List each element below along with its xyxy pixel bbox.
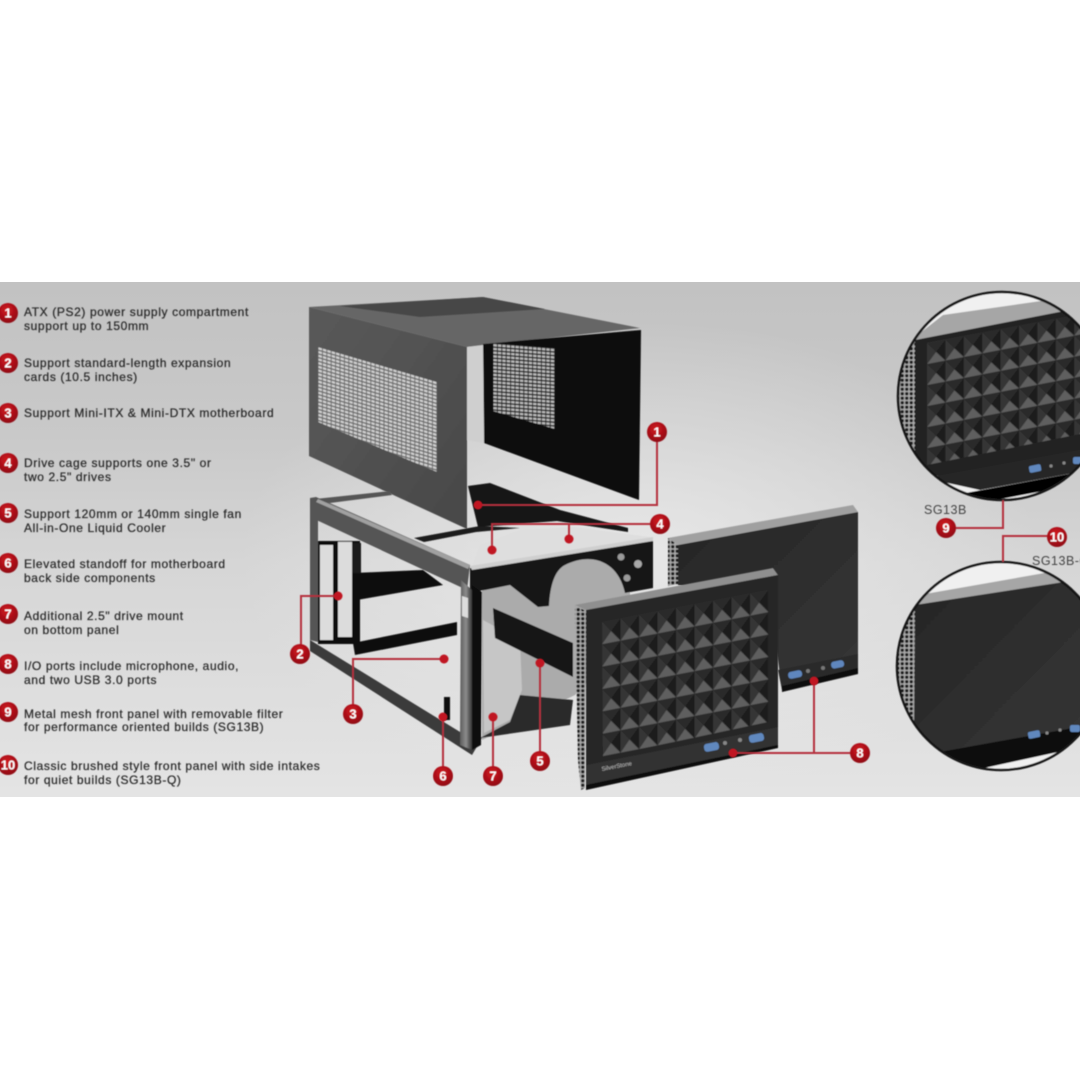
feature 6	[0, 553, 226, 585]
brand mark: SilverStone	[601, 761, 633, 773]
feature 6: back side components	[24, 571, 156, 585]
callout 3	[343, 654, 448, 724]
feature 9	[0, 702, 283, 734]
callout 7: 7	[489, 768, 497, 784]
feature 7: Additional 2.5" drive mount	[24, 609, 184, 623]
feature 8: 8	[4, 656, 12, 672]
callout 9: SG13B: SG13B	[924, 503, 967, 517]
top rail	[310, 497, 470, 590]
feature 2: cards (10.5 inches)	[24, 370, 138, 384]
callout 6: 6	[439, 768, 447, 784]
feature 1: 1	[4, 306, 12, 320]
feature 10: 10	[1, 758, 15, 772]
feature 2: 2	[4, 356, 12, 370]
feature 10	[0, 755, 320, 787]
feature 1: ATX (PS2) power supply compartment	[24, 305, 249, 319]
feature 9: for performance oriented builds (SG13B)	[24, 720, 264, 734]
callout 5: 5	[536, 754, 544, 768]
feature 3: Support Mini-ITX & Mini-DTX motherboard	[24, 406, 274, 420]
callout 8	[728, 676, 870, 763]
feature 5	[0, 503, 242, 535]
feature 5: 5	[4, 506, 12, 520]
feature 4: 4	[4, 456, 12, 470]
side black bars	[353, 570, 443, 600]
drive cage bracket	[468, 483, 628, 532]
drive tray	[472, 527, 653, 567]
feature 9: 9	[4, 704, 12, 720]
feature 10: for quiet builds (SG13B-Q)	[24, 773, 182, 787]
feature 4	[0, 453, 212, 484]
grey infographic band	[0, 282, 1080, 800]
feature 3	[0, 403, 274, 423]
feature list	[0, 303, 320, 787]
feature 2	[0, 353, 231, 384]
feature 8: I/O ports include microphone, audio,	[24, 659, 239, 673]
callout 5	[530, 658, 550, 771]
callout 9: SG13B: 9	[942, 520, 950, 536]
feature 7: on bottom panel	[24, 623, 119, 637]
feature 5: All-in-One Liquid Cooler	[24, 521, 166, 535]
feature 1	[0, 303, 249, 333]
callout 1: 1	[653, 424, 661, 440]
feature 8	[0, 654, 239, 687]
callout 7	[483, 712, 503, 786]
feature 7	[0, 604, 184, 637]
I/O ports	[703, 733, 765, 752]
bottom rail	[310, 640, 482, 755]
I/O ports	[788, 660, 845, 679]
zoom circle: SG13B-Q	[897, 562, 1080, 770]
callout 2	[290, 592, 342, 664]
callout 1	[474, 422, 667, 510]
rear brushed front panel	[668, 505, 858, 692]
mesh front panel	[575, 568, 778, 790]
callout 6	[433, 712, 453, 786]
feature 5: Support 120mm or 140mm single fan	[24, 507, 242, 521]
feature 10: Classic brushed style front panel with side intakes	[24, 759, 320, 773]
feature 1: support up to 150mm	[24, 319, 149, 333]
callout 10: SG13B-Q: 10	[1050, 530, 1064, 544]
callout 4	[488, 514, 670, 554]
feature 4: Drive cage supports one 3.5" or	[24, 456, 212, 470]
case frame	[310, 483, 653, 755]
feature 4: two 2.5" drives	[24, 470, 112, 484]
left post	[310, 500, 318, 642]
callout 8: 8	[856, 746, 864, 760]
case top shell	[309, 297, 641, 529]
callout 2: 2	[296, 646, 304, 662]
feature 3: 3	[4, 406, 12, 420]
callout 9: SG13B	[924, 500, 1003, 538]
callout 4: 4	[656, 516, 664, 532]
feature 6: 6	[4, 556, 12, 570]
zoom circle: SG13B	[898, 292, 1080, 502]
feature 6: Elevated standoff for motherboard	[24, 557, 226, 571]
callout 3: 3	[349, 706, 357, 722]
feature 9: Metal mesh front panel with removable filter	[24, 707, 283, 721]
expansion slots	[318, 541, 360, 644]
feature 2: Support standard-length expansion	[24, 356, 231, 370]
interior and floor	[482, 548, 630, 740]
feature 7: 7	[4, 606, 12, 622]
callout 10: SG13B-Q	[1003, 527, 1080, 568]
feature 8: and two USB 3.0 ports	[24, 673, 157, 687]
front post	[460, 580, 472, 750]
fan bracket	[470, 538, 653, 607]
